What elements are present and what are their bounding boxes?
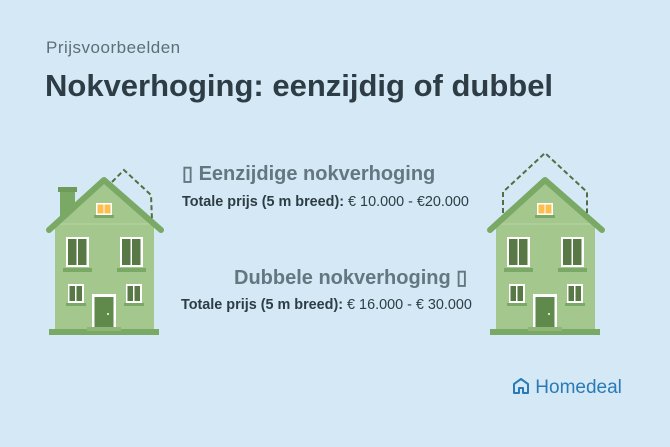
price: eenzijdige: Totale prijs (5 m breed): € 10.000 - €20.000 xyxy=(182,194,469,210)
heading: dubbele: Dubbele nokverhoging ▯ xyxy=(234,267,467,289)
title: Nokverhoging: eenzijdig of dubbel xyxy=(45,68,553,103)
kicker: Prijsvoorbeelden xyxy=(46,38,181,57)
logo: Homedeal xyxy=(535,377,622,398)
heading: eenzijdige: ▯ Eenzijdige nokverhoging xyxy=(182,163,435,185)
price: dubbele: Totale prijs (5 m breed): € 16.000 - € 30.000 xyxy=(181,297,472,313)
icon: left house xyxy=(49,170,161,335)
icon: right house xyxy=(490,153,602,335)
